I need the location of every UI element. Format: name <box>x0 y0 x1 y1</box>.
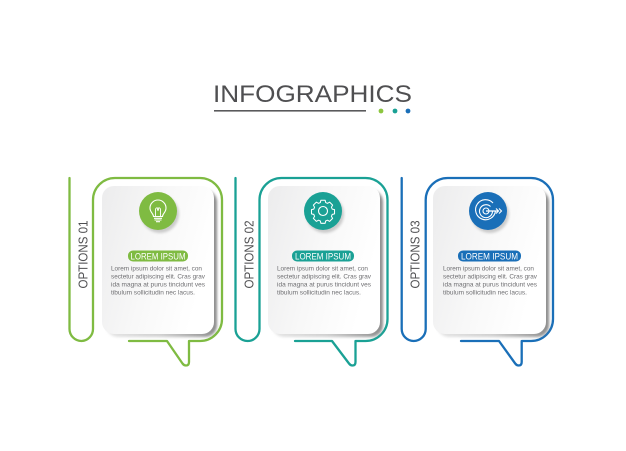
card <box>433 186 549 337</box>
body text <box>443 266 538 296</box>
option label: OPTIONS 01 <box>76 220 90 288</box>
body text <box>111 266 206 296</box>
outline: speech bubble <box>70 178 222 366</box>
card <box>268 186 383 337</box>
body text: Lorem ipsum dolor sit amet, con <box>443 266 534 272</box>
body text: Lorem ipsum dolor sit amet, con <box>277 266 368 272</box>
panel: option 02 <box>236 178 388 366</box>
option label: OPTIONS 02 <box>242 220 256 288</box>
card <box>102 186 217 337</box>
body text: tibulum sollicitudin nec lacus. <box>111 290 195 296</box>
body text: sectetur adipiscing elit. Cras grav <box>111 274 206 280</box>
heading pill: LOREM IPSUM <box>461 252 518 262</box>
body text: ida magna at purus tincidunt ves <box>277 282 372 288</box>
icon: light bulb <box>139 192 179 233</box>
option label: OPTIONS 03 <box>408 220 422 288</box>
body text: sectetur adipiscing elit. Cras grav <box>277 274 372 280</box>
heading pill: LOREM IPSUM <box>130 252 186 262</box>
body text: Lorem ipsum dolor sit amet, con <box>111 266 202 272</box>
icon: target with arrow <box>469 192 509 233</box>
heading pill: LOREM IPSUM <box>295 252 351 262</box>
panel: option 01 <box>70 178 222 366</box>
icon: gear <box>304 192 344 233</box>
body text: sectetur adipiscing elit. Cras grav <box>443 274 538 280</box>
body text: ida magna at purus tincidunt ves <box>111 282 206 288</box>
outline: speech bubble <box>236 178 388 366</box>
outline: speech bubble <box>402 178 553 366</box>
body text: tibulum sollicitudin nec lacus. <box>443 290 527 296</box>
body text: tibulum sollicitudin nec lacus. <box>277 290 361 296</box>
title: INFOGRAPHICS <box>213 81 412 108</box>
panel: option 03 <box>402 178 553 366</box>
body text: ida magna at purus tincidunt ves <box>443 282 538 288</box>
body text <box>277 266 372 296</box>
